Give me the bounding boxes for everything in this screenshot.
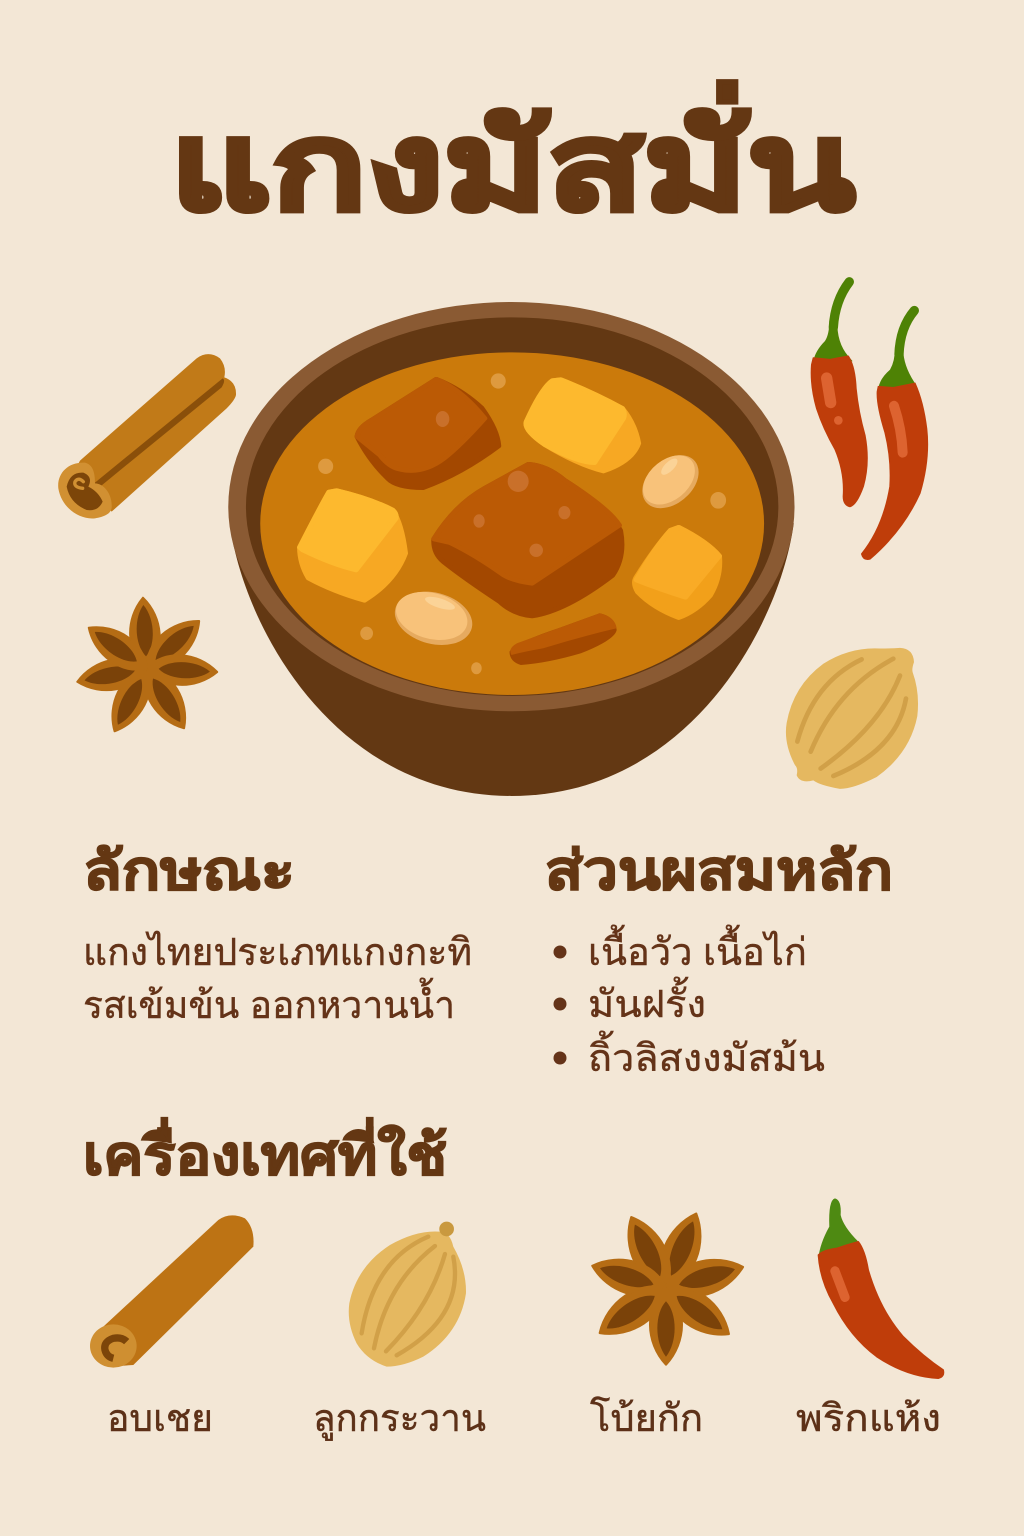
icon: cinnamon stick	[58, 354, 236, 518]
icon: cardamom pod	[786, 648, 918, 789]
text block: description	[83, 931, 472, 1027]
oil droplets	[318, 373, 726, 674]
icon: star anise	[74, 597, 218, 738]
panel: main ingredients	[545, 841, 893, 1080]
peanut: lower	[386, 582, 481, 654]
potato: left	[300, 491, 405, 600]
spice: star anise	[588, 1207, 747, 1440]
beef: centre	[434, 464, 622, 616]
ingredient list: เนื้อวัว เนื้อไก่	[588, 924, 807, 974]
spice: cinnamon	[90, 1215, 254, 1440]
peanut: upper	[631, 445, 710, 518]
title: แกงมัสมั่น	[170, 81, 855, 235]
icon: star anise	[588, 1207, 747, 1365]
label: ลูกกระวาน	[313, 1398, 486, 1441]
icon: dried chilli	[818, 1198, 944, 1378]
label: อบเชย	[107, 1398, 213, 1440]
icon: cardamom	[349, 1222, 466, 1367]
icon: two chillies	[811, 282, 927, 559]
cinnamon piece in curry	[510, 613, 617, 665]
bowl interior	[246, 317, 778, 696]
panel: characteristics	[83, 841, 472, 1027]
potato: upper right	[526, 380, 638, 471]
spice: cardamom	[313, 1222, 486, 1441]
bowl body	[230, 523, 794, 796]
bowl rim	[228, 302, 795, 711]
label: โบ้ยกัก	[590, 1396, 703, 1440]
ingredient list: ถิ้วลิสงงมัสม้น	[588, 1030, 825, 1080]
text block: description: แกงไทยประเภทแกงกะทิ	[83, 931, 472, 974]
text block: description: รสเข้มข้น ออกหวานน้ำ	[83, 977, 455, 1027]
curry bowl	[228, 302, 795, 796]
curry soup	[260, 352, 764, 695]
heading: main ingredients: ส่วนผสมหลัก	[545, 841, 893, 901]
heading: characteristics: ลักษณะ	[83, 841, 295, 901]
spice: dried chilli	[796, 1198, 944, 1440]
ingredient list: มันฝรั้ง	[588, 976, 706, 1026]
heading: spices used: เครื่องเทศที่ใช้	[83, 1117, 447, 1186]
ingredient list	[554, 924, 825, 1080]
label: พริกแห้ง	[796, 1398, 941, 1440]
icon: cinnamon	[90, 1215, 254, 1368]
beef: upper left	[357, 379, 499, 488]
potato: right	[635, 527, 720, 618]
